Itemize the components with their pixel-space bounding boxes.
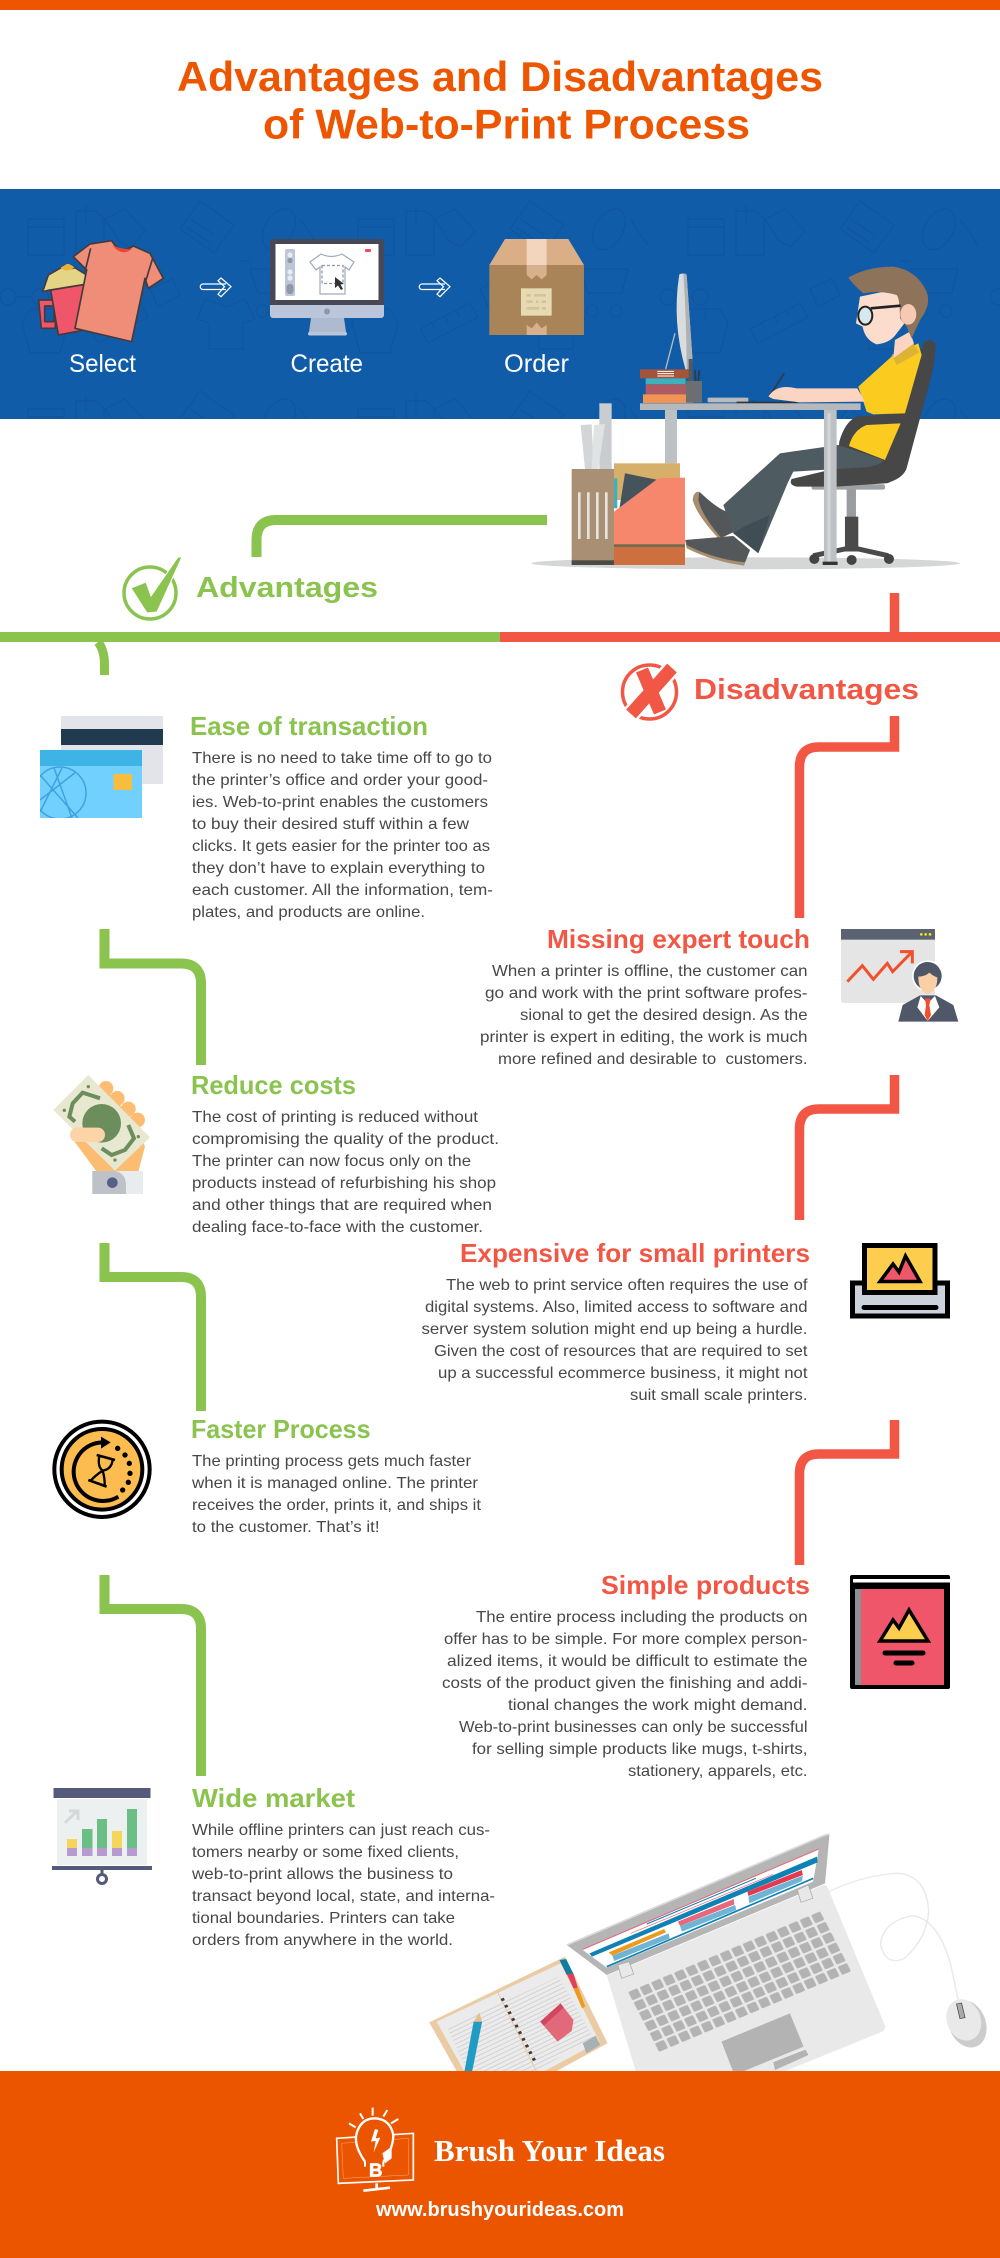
- body text: for selling simple products like mugs, t-shirts,: [472, 1741, 808, 1758]
- heading: Expensive for small printers: [460, 1238, 810, 1268]
- heading: Faster Process: [191, 1414, 370, 1444]
- title: [177, 53, 823, 148]
- body text: when it is managed online. The printer: [191, 1475, 478, 1492]
- icon: shirts and mug: [39, 241, 163, 342]
- body text: and other things that are required when: [192, 1197, 492, 1214]
- body text: to the customer. That’s it!: [192, 1519, 380, 1536]
- body text: digital systems. Also, limited access to software and: [425, 1299, 808, 1316]
- arrow: select to create: [200, 278, 231, 297]
- panel: missing expert touch: [480, 924, 958, 1068]
- heading: Ease of transaction: [190, 711, 428, 741]
- footer: [0, 2071, 1000, 2258]
- storage: rolled papers and file box: [572, 403, 614, 565]
- connector: red 1: [800, 716, 894, 918]
- divider bar: disadvantages: [500, 632, 1000, 642]
- body text: dealing face-to-face with the customer.: [192, 1219, 483, 1236]
- body text: While offline printers can just reach cus-: [192, 1822, 490, 1839]
- body text: each customer. All the information, tem-: [192, 882, 493, 899]
- heading: Reduce costs: [191, 1070, 356, 1100]
- body text: go and work with the print software profes-: [485, 985, 808, 1002]
- body text: ies. Web-to-print enables the customers: [192, 794, 488, 811]
- body text: to buy their desired stuff within a few: [192, 816, 470, 833]
- body text: [422, 1277, 808, 1404]
- body text: more refined and desirable to customers.: [498, 1051, 808, 1068]
- body text: stationery, apparels, etc.: [628, 1763, 808, 1780]
- icon: green check: [124, 557, 182, 619]
- panel: faster process: [54, 1414, 482, 1536]
- books and pen holder: [640, 359, 702, 403]
- icon: printer: [852, 1246, 948, 1316]
- panel: wide market: [52, 1783, 495, 1949]
- logo: light bulb and monitor: B: [369, 2160, 382, 2181]
- body text: products instead of refurbishing his shop: [192, 1175, 496, 1192]
- panel: expensive for small printers: [422, 1238, 948, 1404]
- panel: ease of transaction: [34, 711, 493, 921]
- connector: green 3: [104, 1243, 201, 1411]
- body text: tional changes the work might demand.: [508, 1697, 808, 1714]
- body text: receives the order, prints it, and ships it: [192, 1497, 482, 1514]
- step: order: [489, 239, 584, 378]
- laptop base: [607, 1885, 885, 2092]
- body text: [191, 1453, 482, 1536]
- person: shirt: [849, 343, 922, 460]
- icon: presentation bar chart: [52, 1788, 152, 1884]
- body text: There is no need to take time off to go to: [192, 750, 492, 767]
- desk top and front leg: [640, 403, 861, 565]
- connector: red 2: [800, 1075, 894, 1220]
- heading: Simple products: [601, 1570, 810, 1600]
- body text: clicks. It gets easier for the printer too as: [192, 838, 490, 855]
- panel: reduce costs: [53, 1070, 499, 1236]
- connector: green 2: [104, 929, 201, 1065]
- label: Create: Create: [290, 350, 363, 378]
- heading: Advantages: Advantages: [196, 572, 378, 604]
- icon: hourglass clock: [54, 1422, 150, 1517]
- body text: compromising the quality of the product.: [192, 1131, 499, 1148]
- blue process band: [0, 189, 1000, 419]
- desk back leg: [665, 410, 677, 463]
- icon: book: [850, 1575, 950, 1689]
- label: Order: Order: [504, 350, 569, 378]
- person: legs and shoes: [685, 445, 883, 566]
- body text: offer has to be simple. For more complex person-: [444, 1631, 808, 1648]
- body text: alized items, it would be difficult to estimate the: [447, 1653, 808, 1670]
- body text: [442, 1609, 808, 1780]
- body text: tional boundaries. Printers can take: [192, 1910, 455, 1927]
- body text: web-to-print allows the business to: [191, 1866, 453, 1883]
- icon: credit cards: [34, 716, 163, 819]
- body text: server system solution might end up being a hurdle.: [422, 1321, 808, 1338]
- connector: green 4: [104, 1575, 201, 1776]
- brand name: Brush Your Ideas: [434, 2133, 665, 2168]
- website: www.brushyourideas.com: [375, 2199, 624, 2221]
- body text: [192, 750, 493, 921]
- keyboard and tablet: [708, 398, 797, 403]
- body text: suit small scale printers.: [630, 1387, 808, 1404]
- body text: transact beyond local, state, and interna-: [192, 1888, 495, 1905]
- person: head: [848, 267, 928, 358]
- monitor side view: [666, 273, 693, 370]
- body text: plates, and products are online.: [192, 904, 425, 921]
- body text: The web to print service often requires the use of: [446, 1277, 808, 1294]
- icon: hand holding banknote: [53, 1075, 150, 1194]
- arrow: create to order: [419, 278, 450, 297]
- top orange bar: [0, 0, 1000, 10]
- body text: tomers nearby or some fixed clients,: [192, 1844, 459, 1861]
- illustration: laptop, notebook and mouse: [429, 1834, 992, 2092]
- step: create: [270, 239, 384, 378]
- body text: the printer’s office and order your good-: [192, 772, 488, 789]
- icon: red cross: [622, 665, 676, 719]
- chair: [791, 340, 936, 565]
- logo: light bulb and monitor: [337, 2108, 413, 2191]
- illustration: designer at desk: [531, 267, 960, 569]
- floor shadow: [531, 557, 960, 569]
- body text: orders from anywhere in the world.: [192, 1932, 453, 1949]
- notebook: [429, 1957, 608, 2085]
- icon: growth chart and businessman: [841, 929, 958, 1022]
- body text: up a successful ecommerce business, it might not: [438, 1365, 808, 1382]
- heading: Wide market: [192, 1783, 355, 1813]
- label: Select: Select: [69, 350, 136, 378]
- body text: When a printer is offline, the customer can: [492, 963, 808, 980]
- panel: simple products: [442, 1570, 950, 1780]
- body text: costs of the product given the finishing and addi-: [442, 1675, 808, 1692]
- body text: [480, 963, 808, 1068]
- body text: sional to get the desired design. As the: [520, 1007, 808, 1024]
- person: arm and pencil: [768, 373, 865, 402]
- body text: The printing process gets much faster: [192, 1453, 471, 1470]
- laptop screen: [567, 1834, 829, 1975]
- body text: Web-to-print businesses can only be successful: [459, 1719, 808, 1736]
- body text: [192, 1109, 499, 1236]
- body text: they don’t have to explain everything to: [192, 860, 485, 877]
- body text: The entire process including the products on: [476, 1609, 808, 1626]
- body text: [191, 1822, 495, 1949]
- divider bar: advantages: [0, 632, 500, 642]
- storage: orange folder: [614, 463, 685, 565]
- heading: Disadvantages: Disadvantages: [694, 674, 919, 706]
- connector: advantages top: [256, 520, 547, 557]
- icon: cardboard box: [489, 239, 584, 335]
- connector: disadvantages top: [890, 593, 899, 632]
- icon: monitor with t-shirt designer: [270, 239, 384, 336]
- title: of Web-to-Print Process: [263, 100, 750, 148]
- body text: Given the cost of resources that are required to set: [434, 1343, 808, 1360]
- connector: advantages stub: [98, 642, 104, 675]
- step: select: [39, 241, 163, 378]
- connector: red 3: [800, 1420, 894, 1565]
- body text: The cost of printing is reduced without: [192, 1109, 479, 1126]
- heading: Missing expert touch: [547, 924, 810, 954]
- body text: printer is expert in editing, the work is much: [480, 1029, 808, 1046]
- mouse and cable: [829, 1873, 992, 2051]
- title: Advantages and Disadvantages: [177, 53, 823, 100]
- body text: The printer can now focus only on the: [192, 1153, 471, 1170]
